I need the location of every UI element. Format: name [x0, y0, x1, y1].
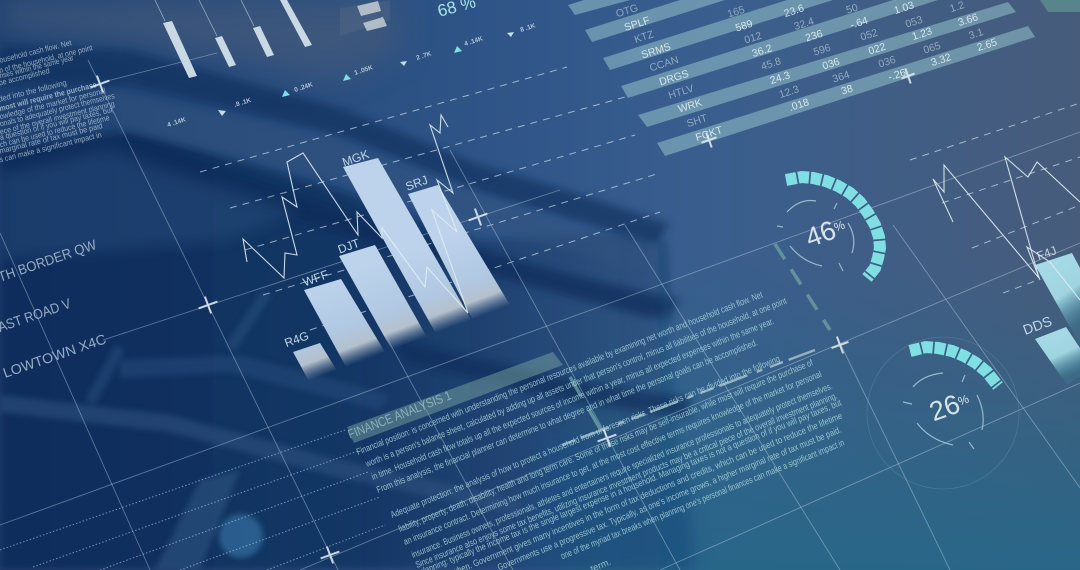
text block: upper left finance copy: owledge of the market for personal: [0, 86, 107, 121]
location labels: left: [0, 236, 108, 381]
table row: OTG and SPLF: 165: [726, 4, 746, 20]
table row: HTLV: HTLV: [667, 82, 695, 102]
table row: SHT: SHT: [685, 112, 709, 130]
text block: adequate protection: insurance. Business owners, professionals, athletes and entertainers require specialized insurance professionals to adequately protect themselves.: [410, 381, 834, 560]
text block: adequate protection: one of the myriad tax breaks when planning one's personal finances can make a significant impact in: [559, 438, 846, 561]
stat markers: triangles with values: .8 .1K: [233, 97, 252, 109]
table row: SRMS: SRMS: [640, 41, 672, 61]
table row: SHT: 12.3: [778, 83, 801, 101]
line chart: main: [243, 115, 468, 313]
table row: WRK: 022: [867, 41, 887, 57]
table row: WRK: 3.66: [957, 11, 980, 29]
dashed chart rules: [200, 67, 1080, 330]
text block: upper left finance copy: marginal rate of tax must be paid: [0, 121, 103, 156]
table row: CCAN: [648, 2, 860, 74]
corner swatch: top right: [1040, 0, 1080, 12]
table row: FCKT: 2.65: [976, 36, 999, 54]
table row: WRK: 24.3: [769, 69, 792, 87]
table row: FCKT: -.26: [887, 67, 908, 84]
stat markers: triangles with values: 0 .24K: [293, 81, 314, 94]
text block: upper left finance copy: onals to adequately protect themselves: [0, 91, 115, 128]
table row: OTG and SPLF: SPLF: [623, 14, 651, 34]
table row: HTLV: 052: [859, 27, 879, 43]
table row: HTLV: 596: [812, 42, 832, 58]
candlestick bars: top left: [155, 0, 312, 78]
table row: CCAN: 32.4: [793, 15, 816, 33]
text block: upper left finance copy: [0, 38, 115, 164]
table row: FCKT: 38: [840, 83, 855, 98]
table row: SRMS: 589: [734, 18, 754, 34]
stat markers: triangles with values: [166, 22, 537, 129]
gauge: 26 percent: [867, 337, 1019, 489]
text block: financial position: worth is a person's balance sheet, calculated by adding up all assets under that person's control, minus all liabilities of the household, at one point: [363, 296, 788, 469]
bar: SRJ: SRJ: [404, 173, 430, 194]
bar chart: right: [1021, 243, 1080, 385]
table row: CCAN: 50: [845, 2, 860, 17]
table row: SHT: 036: [877, 54, 897, 70]
table row: CCAN: 012: [743, 30, 763, 46]
table row: SHT: 065: [922, 40, 942, 56]
bar: DJT: [336, 236, 437, 368]
table row: DRGS: DRGS: [658, 68, 690, 88]
table row: WRK: [677, 11, 980, 116]
text block: adequate protection: Adequate protection: the analysis of how to protect a household from unforeseen risks. These risks can be divided into the following: [389, 354, 781, 520]
table bands: [568, 0, 1035, 156]
heading: finance analysis: FINANCE ANALYSIS 1: [346, 388, 453, 442]
table row: SRMS: 23.6: [783, 2, 806, 20]
table row: DRGS: [658, 0, 916, 88]
bar: R4G: R4G: [283, 328, 311, 350]
text block: adequate protection: Since insurance also enjoys some tax benefits, utilizing insurance investment products may be a critical piece of the overall investment planning.: [414, 391, 839, 570]
text block: financial position: in time. Household cash flow totals up all the expected sources of income within a year, minus all expected expenses within the same year.: [370, 316, 775, 482]
text block: upper left finance copy: nses within the same year: [0, 53, 75, 80]
text block: financial position: Financial position: is concerned with understanding the personal resources available by examining net worth and household cash flow. Net: [355, 289, 764, 457]
stat markers: triangles with values: 2 .7K: [415, 50, 433, 62]
stat markers: triangles with values: 4 .14K: [166, 116, 187, 129]
gauge: 46 percent: %: [832, 217, 847, 234]
table row: FCKT: [694, 36, 999, 144]
table row: HTLV: 45.8: [760, 55, 783, 73]
icon: crosshair markers: [88, 66, 917, 567]
text block: adequate protection: an insurance contract. Determining how much insurance to get, at the most cost effective terms requires knowledge of the market for personal: [402, 369, 823, 547]
bar: R4G: [283, 328, 352, 405]
table row: FCKT: FCKT: [694, 124, 725, 144]
text block: upper left finance copy: a question of if you will pay taxes, but: [0, 105, 114, 142]
table row: WRK: 036: [821, 56, 841, 72]
bar: MGK: [340, 147, 480, 350]
stat markers: triangles with values: 4 .14K: [463, 35, 484, 48]
table row: DRGS: -.64: [849, 15, 870, 32]
bar: DDS: DDS: [1021, 313, 1054, 338]
line chart: right: [933, 157, 1080, 300]
bar: F4J: [1035, 243, 1080, 345]
gauge: 46 percent: 46: [801, 215, 840, 253]
table row: OTG and SPLF: OTG: [614, 2, 640, 20]
text block: adequate protection: Governments use a progressive tax. Typically, as one's income grows, a higher marginal rate of tax must be paid.: [496, 425, 843, 570]
bar: WFF: WFF: [301, 267, 330, 289]
text block: upper left finance copy: most will require the purchase: [0, 80, 98, 113]
text block: upper left finance copy: n of the household, at one point: [0, 43, 94, 75]
gauge: 26 percent: %: [956, 391, 971, 408]
table row: CCAN: CCAN: [648, 54, 680, 74]
bar: DDS: [1021, 313, 1080, 385]
table row: DRGS: 36.2: [751, 42, 774, 60]
table row: SRMS: [640, 2, 806, 61]
top readout: percent and blocks: [340, 0, 478, 36]
stat markers: triangles with values: 1 .05K: [353, 64, 374, 77]
text block: financial position: From this analysis, the financial planner can determine to what degree and in what time the personal goals can be accomplished.: [375, 337, 759, 495]
stat markers: triangles with values: 8 .1K: [519, 22, 537, 34]
heading: finance analysis: [346, 352, 563, 443]
bar: WFF: [301, 267, 397, 387]
table row: OTG and SPLF: [614, 2, 746, 46]
table row: OTG and SPLF: KTZ: [633, 28, 656, 46]
bar: MGK: MGK: [340, 147, 371, 169]
table row: FCKT: 3.32: [930, 51, 953, 69]
bar: DJT: DJT: [336, 236, 362, 257]
table row: FCKT: .018: [788, 96, 811, 114]
bar: F4J: F4J: [1035, 243, 1058, 263]
text block: upper left finance copy: ece of the overall investment planning: [0, 99, 115, 136]
bar chart: main: [283, 147, 522, 405]
table row: HTLV: 053: [904, 14, 924, 30]
table row: DRGS: 236: [804, 28, 824, 44]
table row: SHT: [685, 26, 985, 130]
table row: SHT: 3.1: [967, 26, 985, 42]
table row: WRK: WRK: [677, 97, 704, 116]
text block: upper left finance copy: ch can be used to reduce the lifetime: [0, 113, 111, 149]
table row: HTLV: [667, 0, 966, 102]
gauge: 46 percent: [777, 177, 880, 278]
text block: upper left finance copy: s can make a significant impact in: [0, 130, 102, 164]
gauge: 26 percent: 26: [925, 389, 964, 427]
location labels: left: LOWTOWN X4C: [1, 331, 108, 381]
table row: WRK: 1.23: [911, 25, 934, 43]
table: ticker rows: [568, 0, 1035, 156]
text block: adequate protection: liability, property, death, disability, health and long term care. Some of these risks may be self-insurable, while most will require the purchase of: [397, 357, 815, 534]
table row: SHT: 364: [831, 69, 851, 85]
bar: SRJ: [404, 173, 522, 338]
